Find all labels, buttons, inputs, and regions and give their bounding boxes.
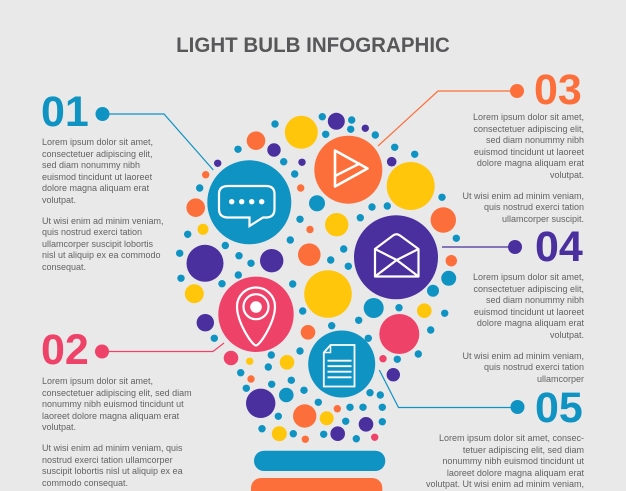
text block 04: euismod tincidunt ut laoreet <box>474 307 584 317</box>
bulb base: teal bar <box>254 451 385 471</box>
text block 04: ullamcorper <box>537 374 584 384</box>
number 02: 02 <box>41 326 89 374</box>
text block 01 <box>42 137 164 272</box>
number 04: 04 <box>535 223 583 271</box>
text block 01: nisl ut aliquip ex ea commodo <box>42 250 161 260</box>
text block 03: sed diam nonummy nibh <box>486 135 584 145</box>
text block 01: consequat. <box>42 262 86 272</box>
text block 02: commodo consequat. <box>42 478 128 488</box>
number 05: 05 <box>535 384 583 432</box>
icon: envelope <box>354 215 438 299</box>
text block 03: ullamcorper suscipit. <box>502 214 584 224</box>
text block 04: quis nostrud exerci tation <box>484 362 584 372</box>
number 03: 03 <box>534 66 582 114</box>
text block 01: dolore magna aliquam erat <box>42 183 149 193</box>
text block 02: nostrud exerci tation ullamcorper <box>42 455 173 465</box>
number 01: 01 <box>41 88 89 136</box>
text block 03: consectetuer adipiscing elit, <box>473 124 584 134</box>
text block 01: euismod tincidunt ut laoreet <box>42 172 152 182</box>
text block 01: volutpat. <box>42 195 76 205</box>
text block 01: quis nostrud exerci tation <box>42 227 142 237</box>
text block 01: Ut wisi enim ad minim veniam, <box>42 216 164 226</box>
text block 02: laoreet dolore magna aliquam erat <box>42 411 179 421</box>
text block 03 <box>462 112 584 224</box>
icon: map pin <box>218 277 294 352</box>
text block 03: dolore magna aliquam erat <box>477 158 584 168</box>
text block 01: sed diam nonummy nibh <box>42 160 140 170</box>
text block 05: Lorem ipsum dolor sit amet, consec- <box>439 433 584 443</box>
marker 04 <box>508 240 522 254</box>
icon: play button <box>314 136 382 204</box>
connector 04 <box>442 246 515 248</box>
text block 01: ullamcorper suscipit lobortis <box>42 239 153 249</box>
text block 04: Ut wisi enim ad minim veniam, <box>462 351 584 361</box>
text block 03: Ut wisi enim ad minim veniam, <box>462 191 584 201</box>
text block 02: volutpat. <box>42 422 76 432</box>
text block 02 <box>42 376 192 488</box>
text block 03: Lorem ipsum dolor sit amet, <box>473 112 584 122</box>
marker 05 <box>510 400 524 414</box>
bulb dots <box>176 113 460 443</box>
text block 02: suscipit lobortis nisl ut aliquip ex ea <box>42 466 183 476</box>
connector 05 <box>379 370 517 408</box>
icon: document <box>308 330 375 398</box>
text block 04: sed diam nonummy nibh <box>486 295 584 305</box>
marker 01 <box>96 107 110 121</box>
connector 03 <box>378 91 517 146</box>
text block 03: euismod tincidunt ut laoreet <box>474 147 584 157</box>
marker 02 <box>95 344 109 358</box>
text block 03: quis nostrud exerci tation <box>484 202 584 212</box>
text block 04: volutpat. <box>550 330 584 340</box>
text block 05 <box>426 433 584 489</box>
text block 05: tetuer adipiscing elit, sed diam <box>463 445 584 455</box>
text block 02: Lorem ipsum dolor sit amet, <box>42 376 153 386</box>
text block 05: nonummy nibh euismod tincidunt ut <box>442 456 584 466</box>
text block 04 <box>462 272 584 384</box>
text block 01: consectetuer adipiscing elit, <box>42 149 153 159</box>
text block 04: dolore magna aliquam erat <box>477 318 584 328</box>
connector 01 <box>102 114 213 170</box>
text block 01: Lorem ipsum dolor sit amet, <box>42 137 153 147</box>
connector 02 <box>102 343 224 352</box>
text block 02: Ut wisi enim ad minim veniam, quis <box>42 443 183 453</box>
text block 02: consectetuer adipiscing elit, sed diam <box>42 388 192 398</box>
text block 03: volutpat. <box>550 170 584 180</box>
text block 04: consectetuer adipiscing elit, <box>473 284 584 294</box>
text block 05: laoreet dolore magna aliquam erat <box>447 468 584 478</box>
marker 03 <box>510 84 524 98</box>
icon: speech bubble <box>207 160 291 244</box>
text block 02: nonummy nibh euismod tincidunt ut <box>42 399 184 409</box>
bulb base: orange bar <box>251 478 382 491</box>
text block 05: volutpat. Ut wisi enim ad minim veniam, <box>426 479 584 489</box>
title: LIGHT BULB INFOGRAPHIC <box>176 33 450 57</box>
text block 04: Lorem ipsum dolor sit amet, <box>473 272 584 282</box>
